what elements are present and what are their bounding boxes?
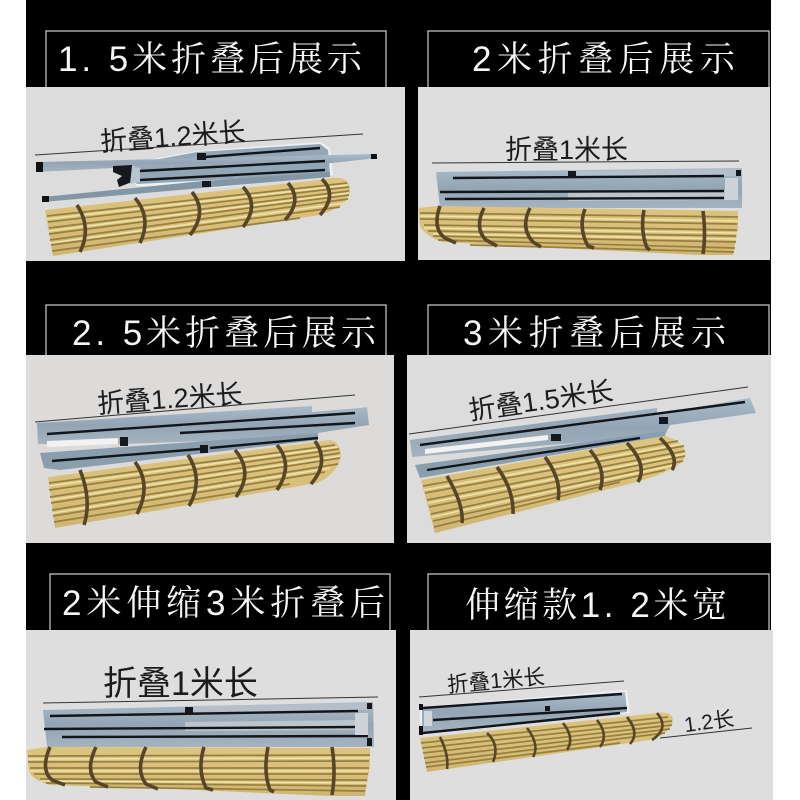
header: 3米折叠后展示: 3米折叠后展示 — [463, 314, 727, 353]
annotation: 折叠1米长 — [43, 665, 378, 703]
header: 2米伸缩3米折叠后: 2米伸缩3米折叠后 — [62, 584, 385, 623]
bamboo roll — [420, 713, 673, 772]
bamboo roll — [48, 440, 341, 528]
annotation: 折叠1米长: 折叠1米长 — [103, 665, 258, 703]
metal frame — [37, 406, 369, 470]
metal frame — [419, 690, 630, 735]
annotation: 折叠1米长: 折叠1米长 — [446, 665, 546, 697]
header: 2米折叠后展示: 2米折叠后展示 — [472, 40, 736, 79]
bamboo roll — [418, 206, 738, 255]
metal frame — [43, 702, 374, 747]
annotation: 1.2长: 1.2长 — [683, 707, 736, 737]
header: 1.5米折叠后展示: 1. 5米折叠后展示 — [58, 40, 363, 79]
metal frame — [36, 142, 377, 202]
header: 2米折叠后展示 — [428, 31, 769, 91]
header: 2米伸缩3米折叠后 — [50, 574, 390, 634]
annotation: 1.2长 — [660, 707, 752, 738]
photo background — [410, 630, 773, 800]
annotation: 折叠1米长: 折叠1米长 — [505, 135, 628, 165]
panel: 2.5米 folded — [26, 305, 394, 543]
photo background — [26, 87, 405, 261]
panel: 伸缩款1.2米宽 — [410, 574, 773, 800]
bamboo roll — [45, 178, 350, 256]
panel: 2米伸缩3米 folded — [26, 574, 396, 800]
header: 2.5米折叠后展示 — [46, 305, 386, 360]
header: 伸缩款1.2米宽 — [428, 574, 769, 634]
bamboo roll — [27, 747, 370, 796]
annotation: 折叠1.5米长: 折叠1.5米长 — [467, 376, 615, 426]
header: 3米折叠后展示 — [428, 305, 769, 360]
panel: 3米 folded — [407, 305, 771, 543]
photo background — [26, 355, 394, 543]
header: 伸缩款1.2米宽: 伸缩款1. 2米宽 — [465, 586, 727, 625]
annotation: 折叠1.2米长 — [35, 379, 355, 422]
panel: 2米 folded — [418, 31, 770, 260]
photo background — [407, 355, 771, 543]
annotation: 折叠1.2米长 — [35, 117, 363, 157]
annotation: 折叠1.5米长 — [409, 376, 748, 434]
annotation: 折叠1.2米长: 折叠1.2米长 — [96, 379, 243, 419]
annotation: 折叠1.2米长: 折叠1.2米长 — [99, 117, 246, 157]
panel: 1.5米 folded — [26, 31, 405, 261]
bamboo roll — [421, 436, 685, 533]
metal frame — [436, 168, 742, 208]
header: 2.5米折叠后展示: 2. 5米折叠后展示 — [72, 314, 377, 353]
metal frame — [410, 398, 756, 478]
header: 1.5米折叠后展示 — [46, 31, 386, 91]
photo background — [26, 630, 396, 800]
annotation: 折叠1米长 — [419, 665, 624, 697]
photo background — [418, 87, 770, 260]
